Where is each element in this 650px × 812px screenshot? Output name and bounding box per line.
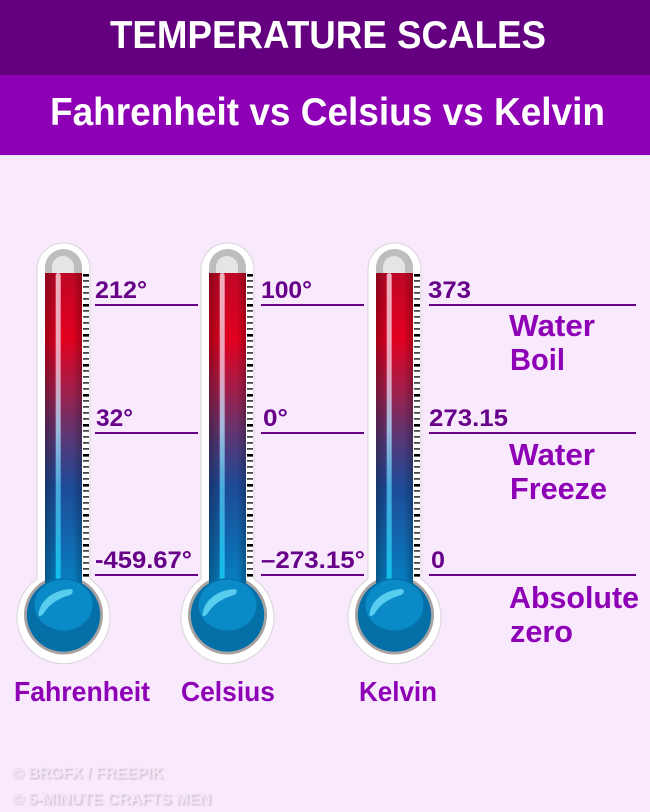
Kelvin scale labels: 0 xyxy=(431,547,445,574)
thermometer: Fahrenheit xyxy=(17,243,110,664)
thermometer: Celsius xyxy=(181,243,274,664)
Celsius scale labels: 0° xyxy=(263,405,288,432)
label: Absolute zero xyxy=(509,580,639,649)
thermometer: Kelvin xyxy=(348,243,441,664)
Fahrenheit scale labels: -459.67° xyxy=(95,547,192,574)
watermark credits xyxy=(12,765,212,810)
label: Water Freeze: Freeze xyxy=(510,471,607,506)
Fahrenheit scale labels xyxy=(95,277,198,576)
Fahrenheit scale labels: 212° xyxy=(95,277,147,304)
Kelvin scale labels: 273.15 xyxy=(429,405,508,432)
watermark credits: © 5-MINUTE CRAFTS MEN xyxy=(14,792,212,810)
title: TEMPERATURE SCALES xyxy=(110,14,546,57)
Celsius scale labels xyxy=(261,277,365,576)
title banner xyxy=(0,0,650,75)
scale name: Fahrenheit: Fahrenheit xyxy=(14,676,150,707)
label: Water Boil xyxy=(509,308,595,377)
scale name: Kelvin: Kelvin xyxy=(359,676,437,707)
Kelvin scale labels: 373 xyxy=(428,277,471,304)
label: Water Boil: Boil xyxy=(510,342,565,377)
subtitle banner xyxy=(0,75,650,155)
Celsius scale labels: 100° xyxy=(261,277,312,304)
label: Absolute zero: Absolute xyxy=(509,580,639,615)
watermark credits: © BRGFX / FREEPIK xyxy=(14,766,165,784)
subtitle: Fahrenheit vs Celsius vs Kelvin xyxy=(50,91,605,134)
label: Water Freeze xyxy=(509,437,607,506)
label: Water Boil: Water xyxy=(509,308,595,343)
Kelvin scale labels xyxy=(428,277,636,576)
label: Absolute zero: zero xyxy=(510,614,573,649)
watermark credits: © 5-MINUTE CRAFTS MEN xyxy=(12,791,211,808)
scale name: Celsius: Celsius xyxy=(181,676,275,707)
watermark credits: © BRGFX / FREEPIK xyxy=(12,765,164,782)
Celsius scale labels: –273.15° xyxy=(261,547,365,574)
label: Water Freeze: Water xyxy=(509,437,595,472)
Fahrenheit scale labels: 32° xyxy=(96,405,133,432)
